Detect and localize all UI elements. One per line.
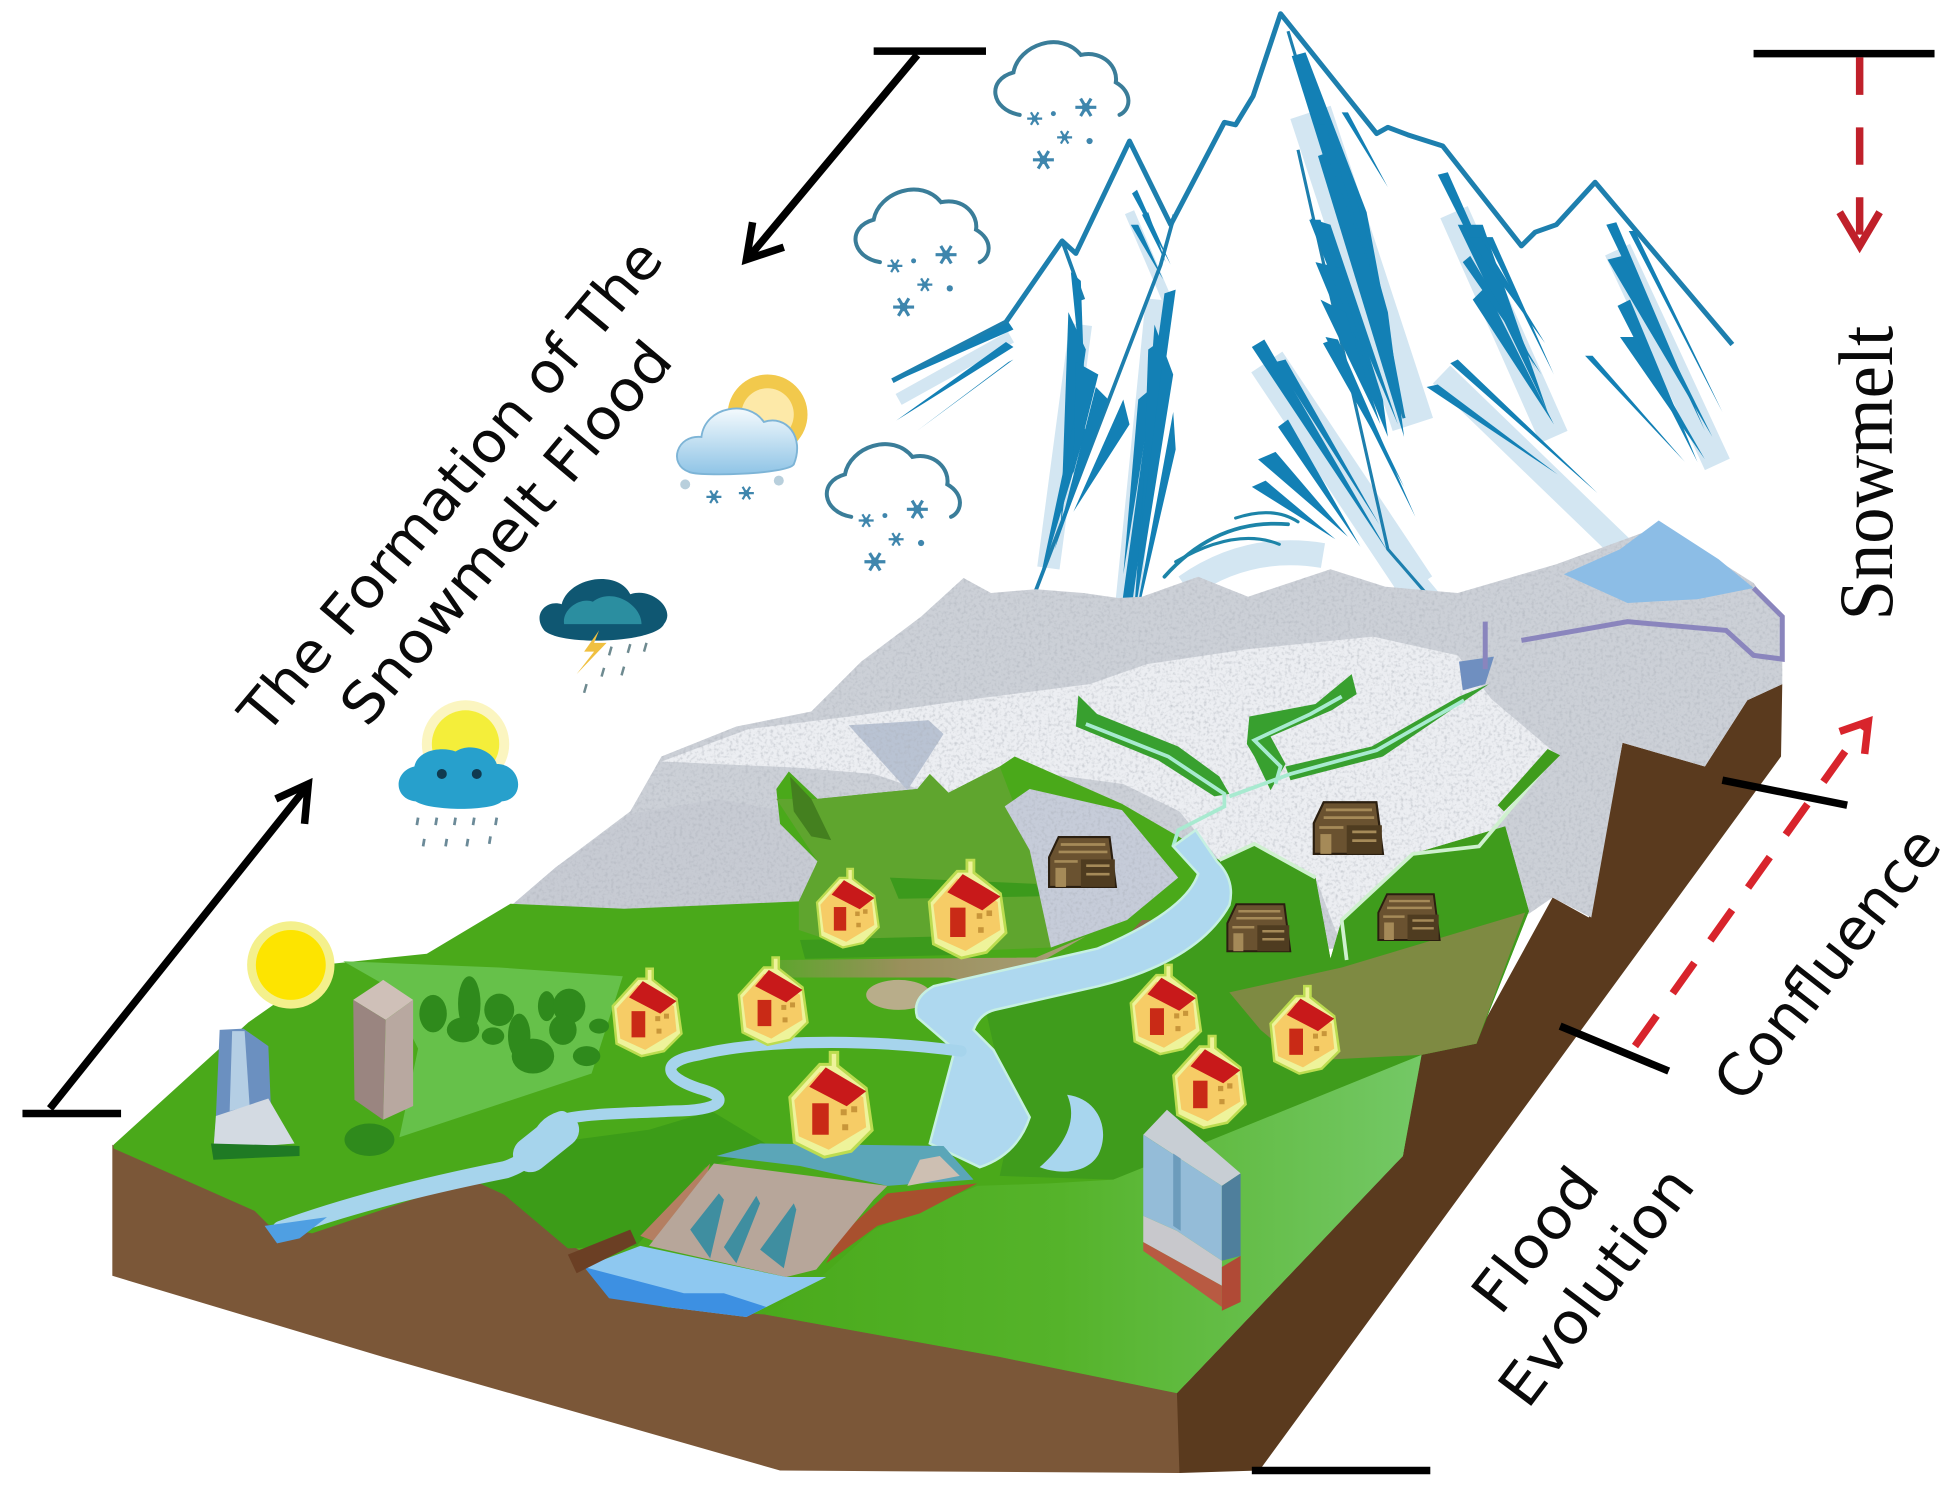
icon: snow cloud top — [995, 42, 1128, 169]
dam: small abutment — [907, 1156, 960, 1186]
mountain: curved ice strokes — [1164, 513, 1342, 620]
arrow: snowmelt red dashed — [1840, 57, 1880, 246]
terrain: blue rock patch on snow — [849, 720, 944, 790]
terrain: pale snow line — [1219, 754, 1556, 960]
terrain: dark meadow band lower — [800, 936, 955, 959]
dam: concrete wall — [649, 1163, 887, 1277]
terrain: dark green by the dam — [472, 1111, 774, 1248]
arrow: flood red dashed — [1635, 722, 1868, 1046]
heading: snowmelt flood: Snowmelt Flood — [328, 329, 686, 738]
dam: left embankment — [640, 1163, 710, 1246]
house: red roof 4 — [739, 957, 808, 1045]
icon: smiling sun behind rain cloud — [399, 700, 518, 846]
terrain: brown bank by river — [1127, 920, 1188, 940]
terrain: olive brown slope — [1229, 913, 1525, 1061]
tick: confluence and snowmelt — [1722, 780, 1847, 805]
label: flood: Flood — [1458, 1155, 1613, 1326]
dam — [568, 1143, 977, 1317]
terrain: left rock hill — [510, 799, 814, 911]
mountain: pale blue shading — [899, 112, 1717, 659]
arrow: top downward — [746, 51, 986, 260]
tributaries: melt streams — [1076, 674, 1489, 846]
icon: snow cloud lower — [827, 444, 960, 570]
house: red roof 6 — [1131, 965, 1201, 1054]
river: mouth at block edge — [265, 1217, 327, 1243]
terrain: small blue summit — [1564, 521, 1754, 603]
house: red roof 2 — [929, 860, 1006, 958]
house: red roof 8 — [1173, 1036, 1246, 1128]
dam: right embankment — [826, 1183, 977, 1263]
mountain: ridge outlines — [892, 14, 1732, 662]
tick: flood evolution and confluence — [1560, 1026, 1669, 1071]
mountain: blue crevices — [894, 52, 1722, 668]
building: office block — [1143, 1110, 1241, 1311]
river: western branch — [281, 1042, 961, 1230]
block: front soil face — [112, 1145, 1186, 1473]
label: snowmelt: Snowmelt — [1823, 325, 1909, 620]
dam: spillways — [690, 1193, 796, 1268]
dam: outflow front — [584, 1267, 766, 1317]
icon: sun with cloud and snow — [677, 374, 808, 503]
label: evolution: Evolution — [1485, 1154, 1708, 1419]
house: red roof 3 — [613, 969, 681, 1056]
tick: bottom — [1252, 1468, 1430, 1474]
terrain: green sliver on snow edge — [1498, 749, 1560, 811]
terrain: grey snow rock mass — [510, 526, 1782, 949]
terrain: dark tree shadow on meadow — [790, 776, 831, 840]
terrain: brown mudflat band — [780, 936, 1086, 986]
house: red roof 5 — [790, 1052, 872, 1157]
icon: sun — [247, 921, 334, 1009]
dam: outflow water — [584, 1246, 826, 1317]
dam: log — [568, 1230, 637, 1273]
bracket: snowmelt top tick — [1754, 51, 1935, 57]
hut 2 — [1314, 802, 1383, 854]
terrain: glacier foot — [1459, 657, 1494, 690]
terrain: dark meadow band — [890, 878, 1042, 899]
terrain: tan sand oval — [866, 980, 931, 1010]
dam: reservoir — [716, 1143, 974, 1186]
river: oxbow pond — [1040, 1095, 1103, 1172]
icon: snow cloud middle — [856, 190, 989, 316]
arrow: lower left upward — [22, 784, 308, 1114]
terrain: main green land — [114, 756, 1529, 1393]
terrain: dark right meadow — [986, 826, 1529, 1180]
building: blue glass tower — [211, 1029, 300, 1160]
label: confluence: Confluence — [1701, 814, 1955, 1113]
terrain: light green lower right field — [765, 1055, 1422, 1393]
building: tan tower — [344, 980, 413, 1156]
trees — [419, 976, 609, 1074]
terrain: light green left field — [343, 961, 623, 1137]
block: right soil face — [1177, 684, 1782, 1473]
terrain: purple glacier line — [1485, 588, 1782, 669]
terrain: light snow field — [661, 637, 1556, 960]
hut 1 — [1049, 837, 1116, 887]
hut 4 — [1378, 894, 1440, 940]
terrain: olive upper meadow — [776, 766, 1051, 955]
icon: storm cloud — [540, 579, 667, 693]
river: main channel — [916, 830, 1231, 1167]
heading: the formation of the: The Formation of The — [226, 228, 676, 746]
hut 3 — [1227, 904, 1290, 951]
mountain: peaks — [892, 14, 1732, 668]
house: red roof 7 — [1271, 986, 1339, 1074]
terrain: blue-grey rock patch — [1005, 789, 1178, 947]
house: red roof 1 — [817, 869, 879, 947]
